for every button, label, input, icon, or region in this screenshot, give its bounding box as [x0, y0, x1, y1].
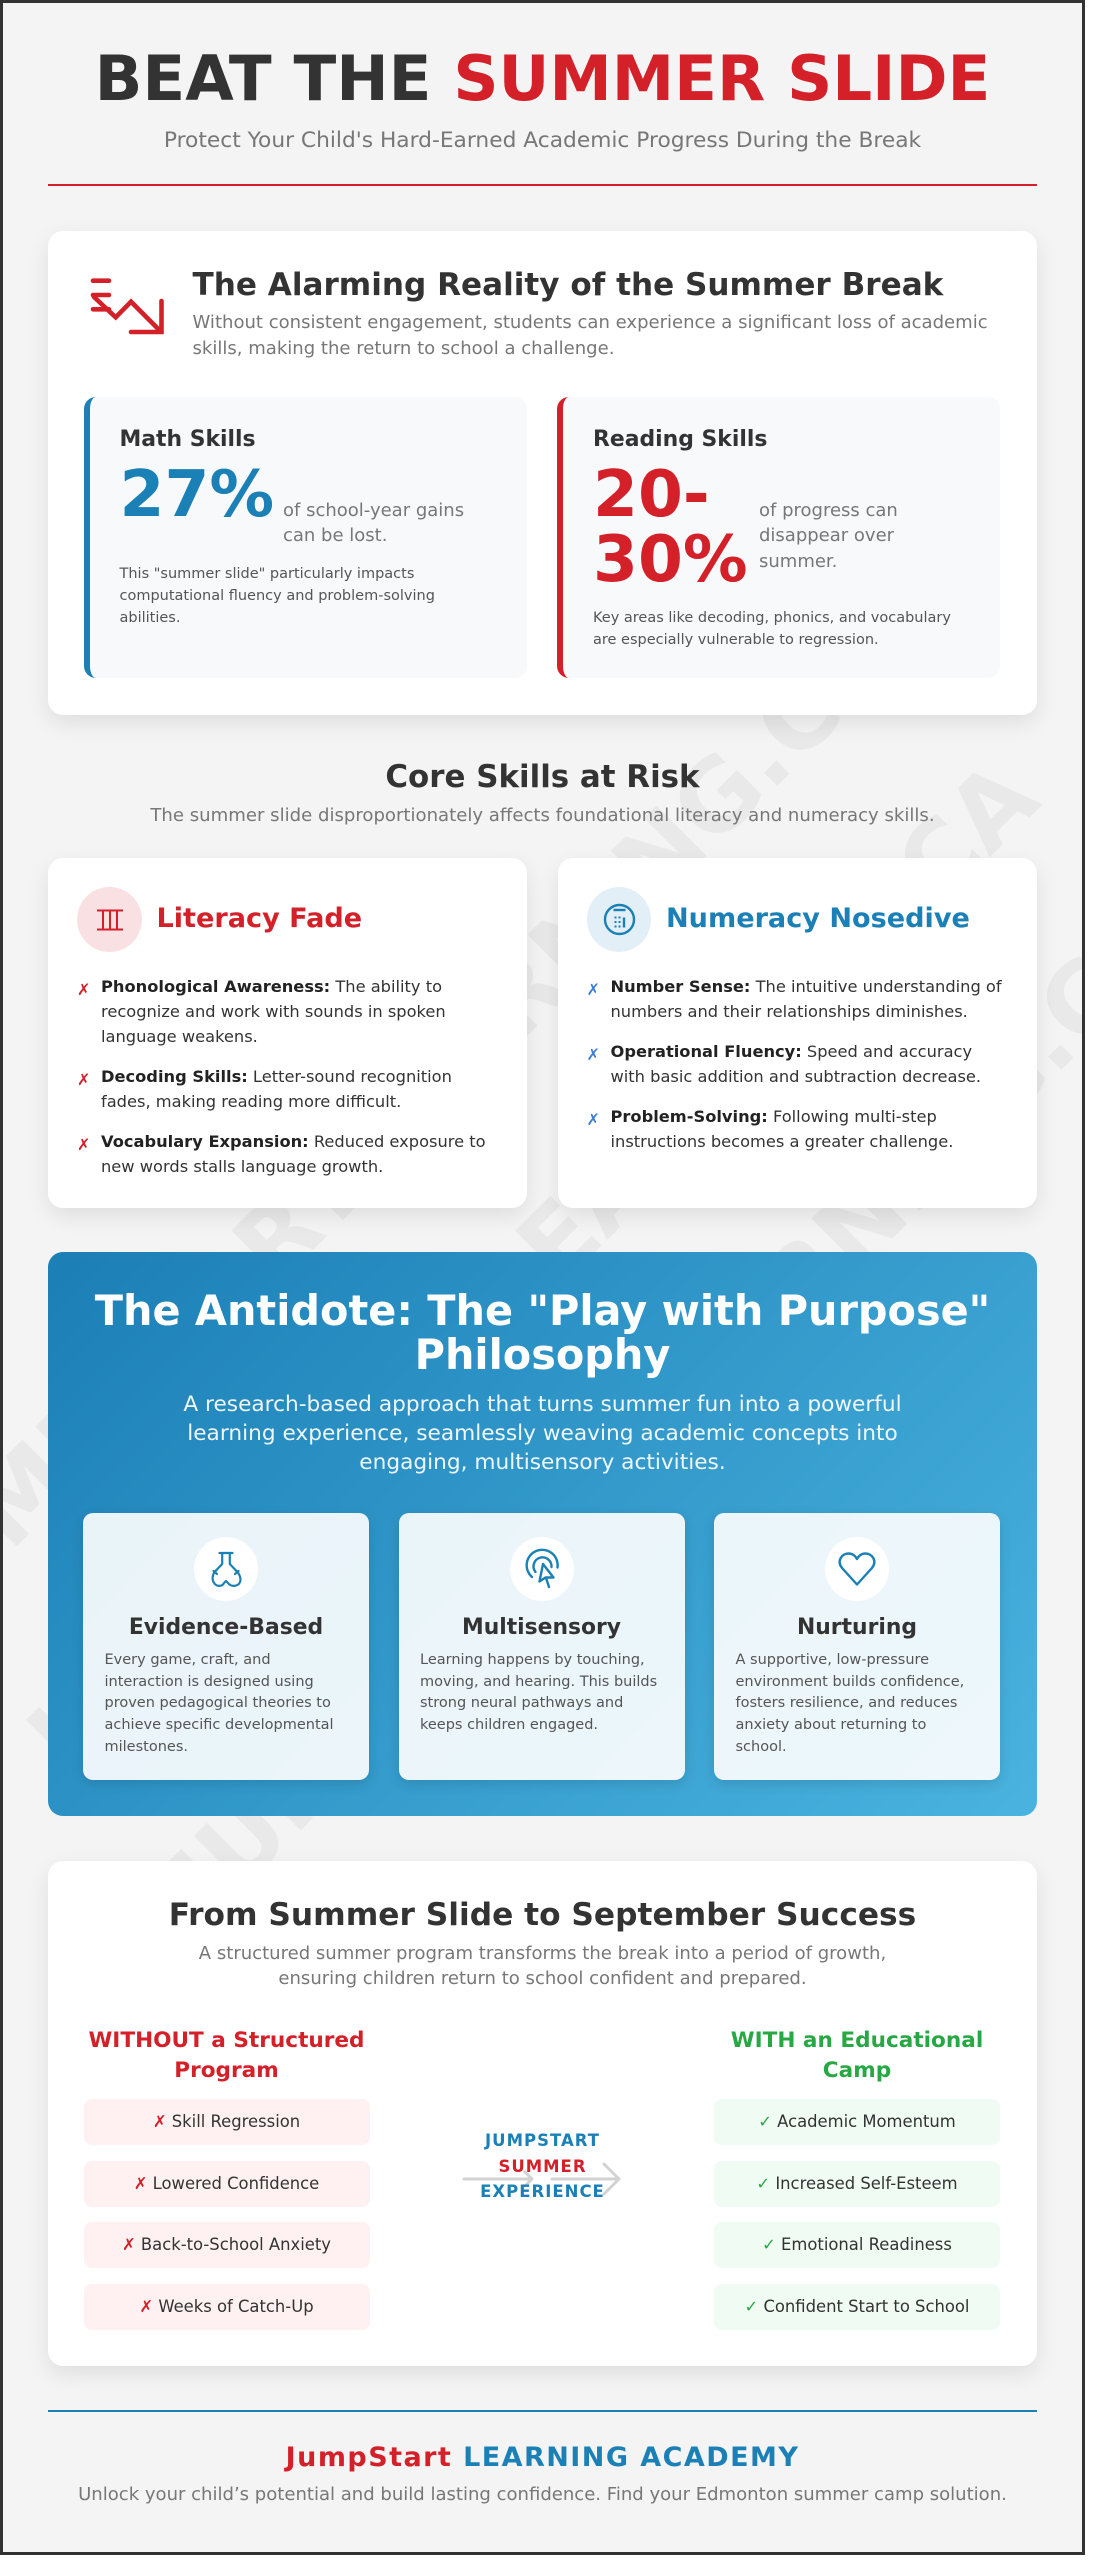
icon: heart — [825, 1536, 889, 1600]
stat note: are especially vulnerable to regression. — [593, 632, 879, 648]
list item — [77, 1067, 452, 1111]
intro text — [192, 312, 988, 359]
antidote heading: Philosophy — [415, 1330, 670, 1378]
stat heading: Reading Skills — [593, 427, 767, 452]
card text: proven pedagogical theories to — [104, 1695, 331, 1711]
stat description: summer. — [759, 551, 837, 572]
panel: numeracy nosedive: instructions becomes a greater challenge. — [610, 1132, 953, 1151]
panel: literacy fade: Vocabulary Expansion: Reduced exposure to — [101, 1132, 486, 1151]
literacy heading: Literacy Fade — [156, 903, 362, 934]
outcome item: ✗ Lowered Confidence — [134, 2174, 319, 2192]
panel: literacy fade: ✗ — [77, 1070, 90, 1089]
card text: keeps children engaged. — [420, 1717, 598, 1733]
card: nurturing — [714, 1512, 1000, 1780]
center label: SUMMER — [498, 2157, 587, 2176]
card text: achieve specific developmental — [104, 1717, 334, 1733]
antidote intro: A research-based approach that turns summer fun into a powerful — [183, 1392, 902, 1417]
outcome item — [84, 2160, 370, 2206]
panel: numeracy nosedive: Operational Fluency: Speed and accuracy — [610, 1042, 972, 1061]
panel: numeracy nosedive: numbers and their relationships diminishes. — [610, 1002, 968, 1021]
card text: strong neural pathways and — [420, 1695, 623, 1711]
core skills subheading: The summer slide disproportionately affects foundational literacy and numeracy skills. — [150, 805, 935, 826]
card text: A supportive, low-pressure — [736, 1652, 929, 1668]
panel: literacy fade: language weakens. — [101, 1027, 258, 1046]
outcome item — [714, 2284, 1000, 2330]
numeracy heading: Numeracy Nosedive — [666, 903, 970, 934]
outcome item: ✗ Skill Regression — [153, 2112, 300, 2131]
panel: literacy fade: Decoding Skills: Letter-sound recognition — [101, 1067, 452, 1086]
card text — [104, 1652, 334, 1755]
card text: Every game, craft, and — [104, 1652, 271, 1668]
watermark: JUMPSTARTLEARNING.CA — [3, 740, 1060, 1798]
stat description — [283, 500, 464, 546]
antidote intro: learning experience, seamlessly weaving academic concepts into — [187, 1421, 898, 1446]
column heading: WITHOUT a Structured — [88, 2028, 365, 2053]
panel: numeracy nosedive — [558, 858, 1037, 1208]
heading: The Alarming Reality of the Summer Break — [192, 267, 943, 303]
heading: core skills: Core Skills at Risk — [385, 759, 700, 795]
outcome item: ✓ Emotional Readiness — [762, 2235, 952, 2254]
center label: JUMPSTART — [485, 2131, 600, 2150]
footer divider — [48, 2410, 1037, 2412]
outcome item — [84, 2284, 370, 2330]
stat note: abilities. — [120, 610, 180, 626]
card text: moving, and hearing. This builds — [420, 1674, 657, 1690]
icon: declining chart — [90, 278, 164, 334]
card text: Learning happens by touching, — [420, 1652, 645, 1668]
center label: EXPERIENCE — [480, 2182, 605, 2201]
column heading — [88, 2028, 365, 2083]
footer tagline: Unlock your child’s potential and build lasting confidence. Find your Edmonton summer camp solution. — [78, 2484, 1007, 2505]
comparison heading: From Summer Slide to September Success — [169, 1896, 916, 1932]
antidote heading — [94, 1287, 990, 1378]
antidote heading: The Antidote: The "Play with Purpose" — [95, 1287, 990, 1335]
card: multisensory — [398, 1512, 684, 1780]
list item — [77, 976, 446, 1046]
touch glyph — [526, 1548, 559, 1588]
panel: literacy fade: ✗ — [77, 1135, 90, 1154]
outcome item: ✗ Weeks of Catch-Up — [139, 2296, 314, 2316]
stat description: disappear over — [759, 525, 894, 546]
antidote intro — [183, 1392, 902, 1475]
outcome item — [84, 2099, 370, 2145]
panel: literacy fade: recognize and work with sounds in spoken — [101, 1002, 446, 1021]
column: with camp — [714, 2028, 1000, 2330]
stat note: Key areas like decoding, phonics, and vocabulary — [593, 610, 951, 626]
outcome item — [714, 2222, 1000, 2268]
card: evidence-based — [83, 1512, 369, 1780]
intro text: skills, making the return to school a challenge. — [192, 338, 614, 359]
stat number: 27% — [120, 457, 274, 532]
panel: alarming reality — [48, 231, 1037, 715]
comparison intro: A structured summer program transforms the break into a period of growth, — [199, 1942, 886, 1964]
footer brand: JumpStart LEARNING ACADEMY — [286, 2442, 799, 2473]
panel: summer slide to september success — [48, 1861, 1037, 2366]
intro text: Without consistent engagement, students can experience a significant loss of academic — [192, 312, 988, 333]
panel: numeracy nosedive: Number Sense: The intuitive understanding of — [610, 976, 1002, 996]
column heading: Camp — [823, 2058, 891, 2083]
comparison intro — [199, 1942, 886, 1989]
column heading — [731, 2028, 983, 2083]
card title: Evidence-Based — [129, 1615, 323, 1640]
stat number: 20- — [593, 457, 710, 532]
panel: numeracy nosedive: ✗ — [586, 1045, 600, 1064]
card text: fosters resilience, and reduces — [736, 1695, 957, 1711]
list item — [77, 1132, 486, 1176]
outcome item: ✓ Confident Start to School — [744, 2296, 969, 2316]
stat note — [593, 610, 951, 648]
stat description: of school-year gains — [283, 500, 464, 521]
antidote intro: engaging, multisensory activities. — [359, 1450, 726, 1475]
comparison intro: ensuring children return to school confident and prepared. — [278, 1968, 807, 1989]
icon: flask — [194, 1536, 258, 1600]
outcome item: ✗ Back-to-School Anxiety — [122, 2235, 331, 2254]
card text: anxiety about returning to — [736, 1717, 926, 1733]
stat note — [119, 566, 435, 626]
subtitle: Protect Your Child's Hard-Earned Academic Progress During the Break — [164, 128, 921, 153]
stat card: reading — [557, 397, 1000, 678]
card text: school. — [736, 1739, 787, 1755]
stat number — [593, 457, 748, 597]
stat note: computational fluency and problem-solving — [120, 588, 435, 604]
stat note: This "summer slide" particularly impacts — [120, 566, 414, 582]
outcome item — [714, 2099, 1000, 2145]
arrow: transformation — [462, 2162, 620, 2196]
card text — [420, 1652, 657, 1733]
outcome item: ✓ Academic Momentum — [758, 2112, 956, 2131]
card title: Multisensory — [462, 1615, 621, 1640]
card text: interaction is designed using — [104, 1674, 314, 1690]
panel: literacy fade: Phonological Awareness: The ability to — [101, 976, 442, 996]
outcome item: ✓ Increased Self-Esteem — [756, 2174, 958, 2192]
icon glyph: columns — [97, 910, 123, 930]
header divider — [48, 184, 1037, 186]
list item — [586, 1042, 981, 1086]
list item — [586, 1107, 953, 1151]
icon glyph: calculator — [604, 904, 636, 936]
icon: numeracy — [586, 887, 651, 952]
card text: milestones. — [104, 1739, 188, 1755]
icon: touch — [510, 1536, 574, 1600]
panel: literacy fade — [48, 858, 527, 1208]
panel: literacy fade: new words stalls language growth. — [101, 1157, 383, 1176]
card text — [736, 1652, 964, 1755]
icon: literacy — [77, 887, 142, 952]
stat description: of progress can — [759, 500, 898, 521]
stat number: 30% — [593, 522, 748, 597]
panel: numeracy nosedive: with basic addition and subtraction decrease. — [610, 1067, 981, 1086]
panel: numeracy nosedive: ✗ — [586, 1110, 600, 1129]
flask glyph — [212, 1552, 242, 1587]
title: BEAT THE SUMMER SLIDE — [95, 42, 990, 115]
card title: Nurturing — [797, 1615, 917, 1640]
panel: literacy fade: ✗ — [77, 980, 90, 998]
card text: environment builds confidence, — [736, 1674, 964, 1690]
panel: numeracy nosedive: Problem-Solving: Following multi-step — [610, 1107, 937, 1126]
panel: numeracy nosedive: ✗ — [586, 980, 600, 998]
heart glyph — [838, 1552, 876, 1586]
stat card: math — [84, 397, 526, 678]
stat description — [759, 500, 898, 572]
stat heading: Math Skills — [120, 427, 256, 452]
outcome item — [84, 2222, 370, 2268]
panel: literacy fade: fades, making reading more difficult. — [101, 1092, 401, 1111]
panel: the antidote — [48, 1252, 1037, 1816]
outcome item — [714, 2160, 1000, 2206]
column heading: WITH an Educational — [731, 2028, 983, 2053]
column heading: Program — [174, 2058, 279, 2083]
column: without program — [84, 2028, 370, 2330]
stat description: can be lost. — [283, 525, 387, 546]
list item — [586, 976, 1002, 1021]
center label — [480, 2131, 605, 2201]
